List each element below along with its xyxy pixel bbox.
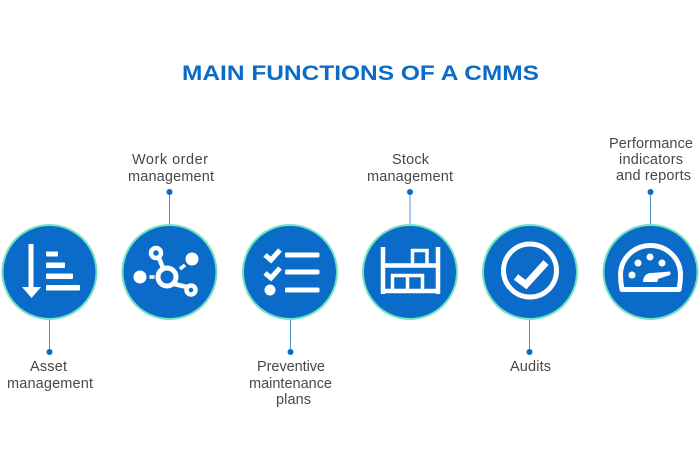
item: work order management bbox=[122, 152, 216, 319]
item: asset management bbox=[2, 225, 96, 392]
label: work order management: management bbox=[128, 169, 214, 185]
label: stock management: management bbox=[367, 169, 453, 185]
label: stock management: Stock bbox=[392, 152, 430, 168]
connector: asset management bbox=[46, 320, 52, 355]
label: audits: Audits bbox=[510, 359, 551, 375]
item: stock management bbox=[363, 152, 457, 319]
label: preventive maintenance plans bbox=[249, 359, 332, 408]
connector: performance indicators and reports bbox=[648, 189, 654, 224]
icon: asset management sorted bars bbox=[2, 225, 96, 319]
label: asset management: management bbox=[7, 376, 93, 392]
icon: work order network bbox=[122, 225, 216, 319]
label: performance indicators and reports: indicators bbox=[619, 152, 683, 168]
connector: work order management bbox=[166, 189, 172, 224]
label: preventive maintenance plans: maintenance bbox=[249, 376, 332, 392]
item: preventive maintenance plans bbox=[243, 225, 337, 408]
label: performance indicators and reports: Performance bbox=[609, 136, 693, 152]
title: MAIN FUNCTIONS OF A CMMS bbox=[182, 62, 539, 85]
item: performance indicators and reports bbox=[604, 136, 698, 319]
connector: preventive maintenance plans bbox=[288, 320, 294, 355]
connector: audits bbox=[526, 320, 532, 355]
item: audits bbox=[483, 225, 577, 375]
icon: check in circle bbox=[483, 225, 577, 319]
icon: gauge bbox=[604, 225, 698, 319]
label: work order management bbox=[128, 152, 214, 185]
label: asset management: Asset bbox=[30, 359, 67, 375]
icon: warehouse shelves bbox=[363, 225, 457, 319]
label: asset management bbox=[7, 359, 93, 392]
label: performance indicators and reports: and reports bbox=[616, 168, 691, 184]
label: preventive maintenance plans: Preventive bbox=[257, 359, 325, 375]
label: performance indicators and reports bbox=[609, 136, 693, 184]
label: stock management bbox=[367, 152, 453, 185]
label: work order management: Work order bbox=[132, 152, 208, 168]
label: preventive maintenance plans: plans bbox=[276, 392, 311, 408]
icon: checklist bbox=[243, 225, 337, 319]
connector: stock management bbox=[407, 189, 413, 224]
